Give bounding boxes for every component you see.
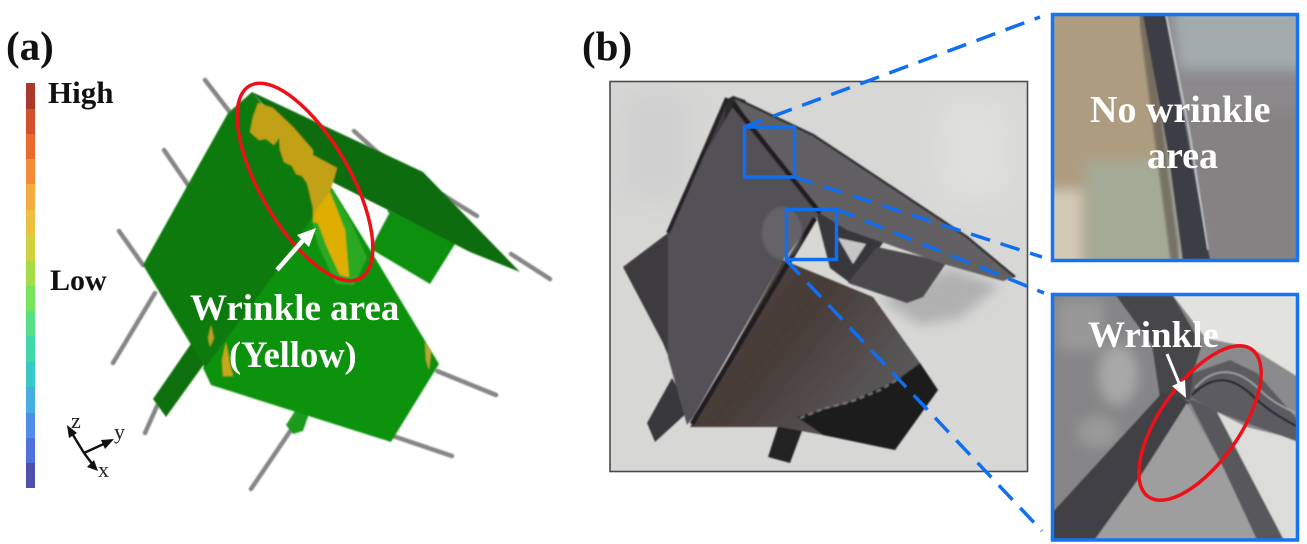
mottled highlights bbox=[1058, 300, 1138, 448]
small yellow spot upper-left bbox=[208, 325, 214, 347]
photo contents bbox=[620, 90, 1015, 463]
top-right background bbox=[1172, 294, 1298, 377]
axis arrows bbox=[67, 425, 114, 471]
wrinkle text: Wrinkle bbox=[1088, 315, 1219, 356]
weld texture bbox=[800, 378, 900, 418]
wrinkle lines bbox=[1192, 372, 1298, 427]
rear box bbox=[848, 247, 947, 303]
rib shadow edge bbox=[1143, 14, 1175, 260]
wrinkled flange bbox=[1190, 360, 1298, 442]
axis label y: y bbox=[114, 419, 125, 444]
lower tab bbox=[767, 426, 803, 464]
panel label: (b): (b) bbox=[582, 23, 632, 69]
blurred tones bbox=[1054, 16, 1296, 259]
dark crease bottom bbox=[692, 218, 815, 424]
highlight box: wrinkle region bbox=[786, 210, 836, 260]
zoom connector lines bbox=[744, 17, 1044, 531]
left tab bbox=[647, 378, 690, 442]
photo frame bbox=[610, 82, 1028, 472]
support pins bbox=[113, 80, 550, 489]
yellow wrinkle region bbox=[250, 103, 349, 277]
no wrinkle text: No wrinkle bbox=[1090, 89, 1270, 131]
opening bbox=[838, 238, 866, 264]
wrinkle area label: Wrinkle area bbox=[190, 288, 399, 329]
left face bbox=[143, 92, 332, 368]
left flange bbox=[623, 98, 727, 365]
inset: no wrinkle area bbox=[1050, 12, 1300, 262]
rib highlight bbox=[1166, 14, 1208, 250]
rounded apex bbox=[716, 95, 746, 123]
dark structure around opening bbox=[816, 212, 884, 286]
arrow: to wrinkle area bbox=[277, 228, 316, 270]
small tab bottom bbox=[286, 408, 309, 434]
photo regions bbox=[1052, 294, 1298, 542]
light lower face bbox=[1093, 403, 1260, 542]
scale label: High: High bbox=[48, 75, 113, 110]
lower face bbox=[203, 188, 439, 442]
small tab left bbox=[153, 338, 207, 417]
base tone bbox=[1143, 16, 1296, 259]
panel label: (a): (a) bbox=[6, 23, 54, 69]
inset photo bbox=[1052, 294, 1298, 542]
dark band top bbox=[1115, 294, 1206, 400]
opening in the part bbox=[334, 185, 389, 247]
green simulated part bbox=[143, 92, 520, 442]
upper flange bbox=[733, 97, 1015, 281]
dark rib bbox=[1143, 14, 1210, 260]
rough area bbox=[762, 207, 802, 259]
axis label x: x bbox=[98, 457, 109, 482]
black weld band bbox=[797, 363, 938, 450]
photo background bbox=[610, 82, 1027, 471]
area text: area bbox=[1147, 135, 1218, 177]
inset frame bbox=[1052, 14, 1298, 260]
axis label z: z bbox=[71, 408, 81, 433]
bottom face bbox=[690, 260, 938, 450]
flange bbox=[1193, 338, 1298, 422]
white gap bbox=[1217, 412, 1298, 542]
part photograph bbox=[623, 96, 1015, 463]
arrow: to wrinkle bbox=[1167, 354, 1186, 398]
background shading bbox=[970, 130, 980, 170]
soft shadow bbox=[880, 268, 1000, 325]
red ellipse: wrinkle bbox=[1116, 326, 1284, 520]
bright yellow wrinkle streak bbox=[313, 192, 349, 277]
rear box bbox=[371, 210, 455, 284]
panel: simulation result bbox=[26, 63, 550, 489]
color scale bar bbox=[26, 83, 35, 488]
yellow label: (Yellow) bbox=[229, 334, 357, 375]
dark right band bbox=[1188, 398, 1285, 542]
panel: photo of formed part bbox=[610, 82, 1028, 472]
red ellipse: wrinkle area bbox=[211, 63, 399, 301]
left edge bbox=[668, 98, 727, 233]
inset photo bbox=[1054, 16, 1296, 259]
base tone bbox=[1054, 296, 1280, 512]
dark crease top bbox=[733, 104, 820, 213]
flange edge bbox=[733, 97, 1015, 277]
left face bbox=[668, 107, 820, 425]
highlight box: no wrinkle region bbox=[744, 127, 794, 177]
inset: wrinkle bbox=[1052, 294, 1298, 542]
small yellow spot left bbox=[222, 342, 233, 376]
dark diagonal band bbox=[1052, 392, 1190, 542]
axis triad bbox=[67, 408, 125, 482]
scale label: Low: Low bbox=[50, 264, 107, 297]
small yellow spot right bbox=[425, 342, 431, 370]
light green wrinkle halo bbox=[312, 190, 367, 285]
upper flange bbox=[252, 92, 520, 272]
inset frame bbox=[1052, 294, 1298, 540]
